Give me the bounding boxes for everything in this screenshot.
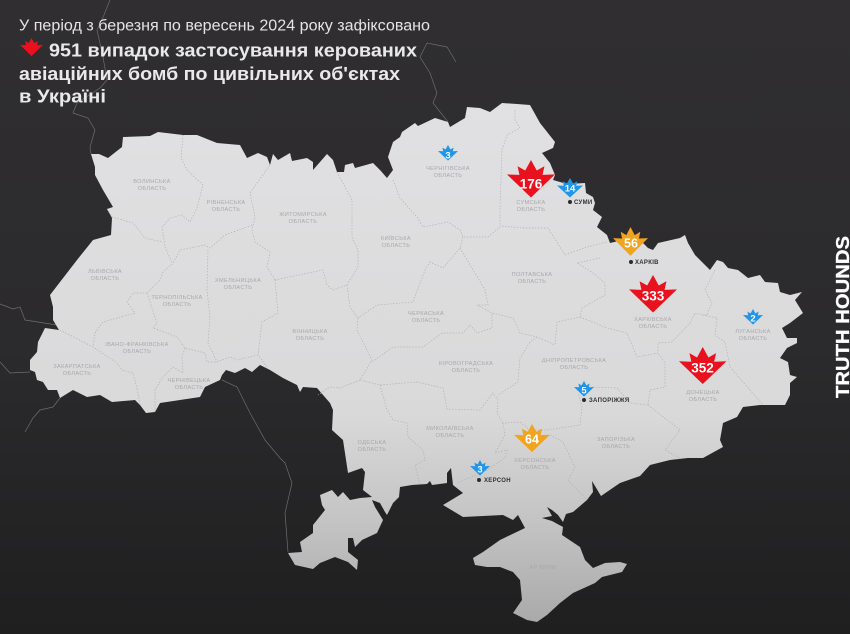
title intro line: У період з березня по вересень 2024 року зафіксовано bbox=[19, 18, 430, 34]
label: Zakarpattia oblast: ОБЛАСТЬ bbox=[63, 371, 91, 377]
label: Ternopil oblast: ТЕРНОПІЛЬСЬКА bbox=[151, 295, 203, 301]
label: Kharkiv oblast: ХАРКІВСЬКА bbox=[634, 317, 672, 323]
badge: Donetsk oblast 352 bbox=[679, 347, 726, 384]
city: Sumy: СУМИ bbox=[574, 200, 592, 206]
label: Rivne oblast: РІВНЕНСЬКА bbox=[206, 200, 246, 206]
label: Sumy oblast: СУМСЬКА bbox=[516, 200, 546, 206]
label: Chernihiv oblast: ЧЕРНІГІВСЬКА bbox=[426, 166, 470, 172]
label: Sumy oblast: ОБЛАСТЬ bbox=[517, 207, 545, 213]
label: Kirovohrad oblast: КІРОВОГРАДСЬКА bbox=[439, 361, 493, 367]
oblast borders bbox=[60, 110, 763, 500]
label: Mykolaiv oblast: МИКОЛАЇВСЬКА bbox=[426, 426, 474, 432]
label: Odesa oblast: ОБЛАСТЬ bbox=[358, 447, 386, 453]
label: Ivano-Frankivsk oblast: ОБЛАСТЬ bbox=[123, 349, 151, 355]
badge: Luhansk oblast 2: 2 bbox=[750, 314, 756, 324]
label: Ivano-Frankivsk oblast: ІВАНО-ФРАНКІВСЬКА bbox=[105, 342, 169, 348]
label: Kyiv oblast: ОБЛАСТЬ bbox=[382, 243, 410, 249]
label: Khmelnytskyi oblast: ОБЛАСТЬ bbox=[224, 285, 252, 291]
icon: title bomb marker bbox=[20, 38, 43, 56]
badge: Kherson city 3 bbox=[470, 460, 490, 476]
label: Zhytomyr oblast: ОБЛАСТЬ bbox=[289, 219, 317, 225]
label: Zakarpattia oblast: ЗАКАРПАТСЬКА bbox=[53, 364, 101, 370]
badge: Chernihiv oblast 3 bbox=[438, 145, 458, 162]
label: Kyiv oblast: КИЇВСЬКА bbox=[381, 236, 411, 242]
label: Dnipropetrovsk oblast: ДНІПРОПЕТРОВСЬКА bbox=[542, 358, 606, 364]
label: Odesa oblast: ОДЕСЬКА bbox=[358, 440, 386, 446]
badge: Kharkiv oblast 333 bbox=[629, 275, 677, 312]
badge: Kherson city 3: 3 bbox=[477, 464, 483, 476]
label: Volyn oblast: ОБЛАСТЬ bbox=[138, 186, 166, 192]
label: Zhytomyr oblast: ЖИТОМИРСЬКА bbox=[279, 212, 327, 218]
badge: Kherson oblast 64: 64 bbox=[525, 432, 539, 446]
badge: Donetsk oblast 352: 352 bbox=[691, 360, 714, 376]
city: Zaporizhzhia: ЗАПОРІЖЖЯ bbox=[589, 398, 630, 404]
label: Kharkiv oblast: ОБЛАСТЬ bbox=[639, 324, 667, 330]
label: Volyn oblast: ВОЛИНСЬКА bbox=[133, 179, 171, 185]
label: Ternopil oblast: ОБЛАСТЬ bbox=[163, 302, 191, 308]
label: Vinnytsia oblast: ВІННИЦЬКА bbox=[292, 329, 328, 335]
city: Kharkiv: ХАРКІВ bbox=[635, 260, 659, 266]
label: Cherkasy oblast: ЧЕРКАСЬКА bbox=[408, 311, 444, 317]
label: Lviv oblast: ОБЛАСТЬ bbox=[91, 276, 119, 282]
badge: Sumy oblast 176: 176 bbox=[520, 176, 543, 192]
label: Kherson oblast: ХЕРСОНСЬКА bbox=[514, 458, 556, 464]
label: Zaporizhzhia oblast: ЗАПОРІЗЬКА bbox=[597, 437, 635, 443]
map: Ukraine land mass bbox=[30, 103, 803, 622]
badge: Zaporizhzhia city 5: 5 bbox=[581, 386, 587, 396]
label: Luhansk oblast: ЛУГАНСЬКА bbox=[735, 329, 771, 335]
label: Dnipropetrovsk oblast: ОБЛАСТЬ bbox=[560, 365, 588, 371]
badge: Zaporizhzhia city 5 bbox=[574, 381, 594, 397]
badge: Chernihiv oblast 3: 3 bbox=[445, 150, 451, 162]
title headline: авіаційних бомб по цивільних об'єктах bbox=[19, 64, 400, 84]
badge: Kharkiv oblast 333: 333 bbox=[642, 288, 665, 304]
label: Mykolaiv oblast: ОБЛАСТЬ bbox=[436, 433, 464, 439]
badge: Sumy city 14 bbox=[557, 178, 583, 198]
label: Khmelnytskyi oblast: ХМЕЛЬНИЦЬКА bbox=[215, 278, 261, 284]
label: Chernivtsi oblast: ЧЕРНІВЕЦЬКА bbox=[168, 378, 210, 384]
label: Kherson oblast: ОБЛАСТЬ bbox=[521, 465, 549, 471]
label: Crimea: АР КРИМ bbox=[529, 565, 557, 571]
title headline: в Україні bbox=[19, 86, 106, 106]
title headline bbox=[19, 40, 417, 106]
label: Cherkasy oblast: ОБЛАСТЬ bbox=[412, 318, 440, 324]
label: Rivne oblast: ОБЛАСТЬ bbox=[212, 207, 240, 213]
label: Poltava oblast: ПОЛТАВСЬКА bbox=[512, 272, 552, 278]
badge: Kharkiv city 56 bbox=[613, 227, 648, 256]
label: Chernihiv oblast: ОБЛАСТЬ bbox=[434, 173, 462, 179]
badge: Sumy oblast 176 bbox=[507, 160, 555, 197]
label: Zaporizhzhia oblast: ОБЛАСТЬ bbox=[602, 444, 630, 450]
label: Donetsk oblast: ДОНЕЦЬКА bbox=[686, 390, 720, 396]
label: Donetsk oblast: ОБЛАСТЬ bbox=[689, 397, 717, 403]
label: Lviv oblast: ЛЬВІВСЬКА bbox=[88, 269, 122, 275]
label: Chernivtsi oblast: ОБЛАСТЬ bbox=[175, 385, 203, 391]
label: Kirovohrad oblast: ОБЛАСТЬ bbox=[452, 368, 480, 374]
label: Vinnytsia oblast: ОБЛАСТЬ bbox=[296, 336, 324, 342]
title headline: 951 випадок застосування керованих bbox=[49, 40, 417, 60]
city: Kherson: ХЕРСОН bbox=[484, 478, 511, 484]
badge: Kharkiv city 56: 56 bbox=[624, 236, 638, 250]
badge: Sumy city 14: 14 bbox=[565, 184, 576, 194]
label: Poltava oblast: ОБЛАСТЬ bbox=[518, 279, 546, 285]
label: Luhansk oblast: ОБЛАСТЬ bbox=[739, 336, 767, 342]
badge: Luhansk oblast 2 bbox=[743, 309, 763, 325]
badge: Kherson oblast 64 bbox=[514, 424, 550, 452]
